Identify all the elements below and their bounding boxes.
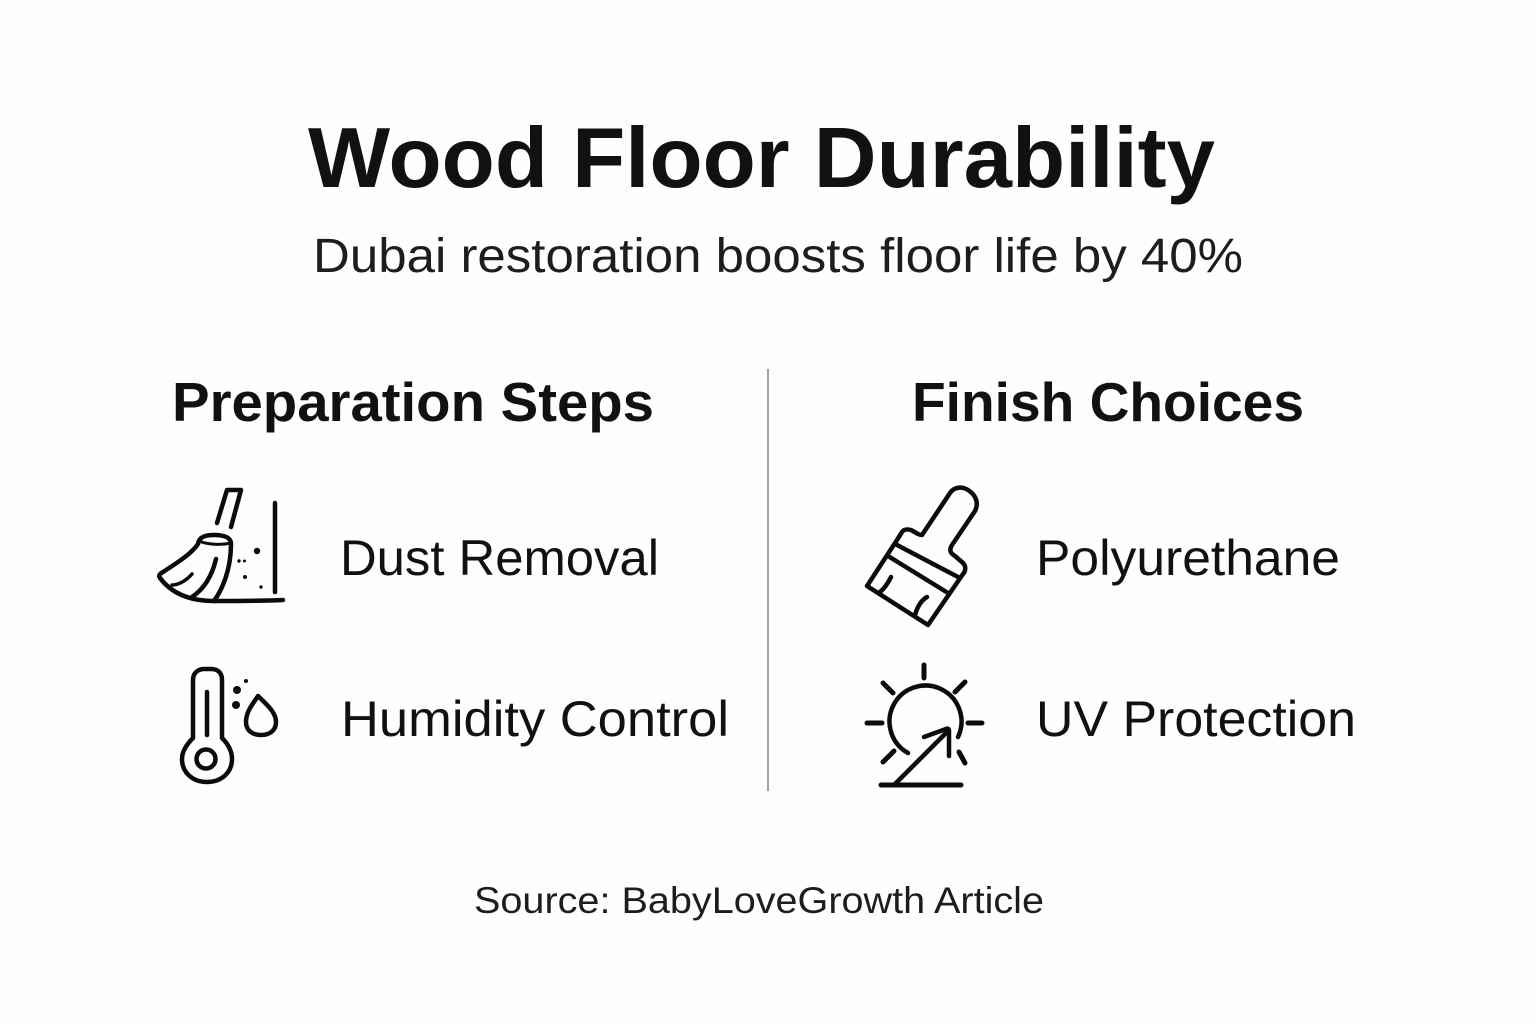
heading: preparation steps: Preparation Steps: [172, 371, 654, 433]
icon: thermometer and droplet: [182, 669, 276, 782]
icon: broom: [159, 490, 283, 601]
subtitle: Dubai restoration boosts floor life by 40%: [313, 230, 1243, 283]
source note: Source: BabyLoveGrowth Article: [474, 880, 1044, 921]
title: Wood Floor Durability: [308, 111, 1215, 206]
icon: sun with UV arrow: [867, 665, 982, 785]
label: polyurethane: Polyurethane: [1036, 530, 1340, 586]
heading: finish choices: Finish Choices: [912, 371, 1304, 433]
icon: paint brush: [867, 488, 977, 625]
label: dust removal: Dust Removal: [340, 530, 659, 586]
label: uv protection: UV Protection: [1036, 691, 1356, 747]
label: humidity control: Humidity Control: [341, 691, 729, 747]
